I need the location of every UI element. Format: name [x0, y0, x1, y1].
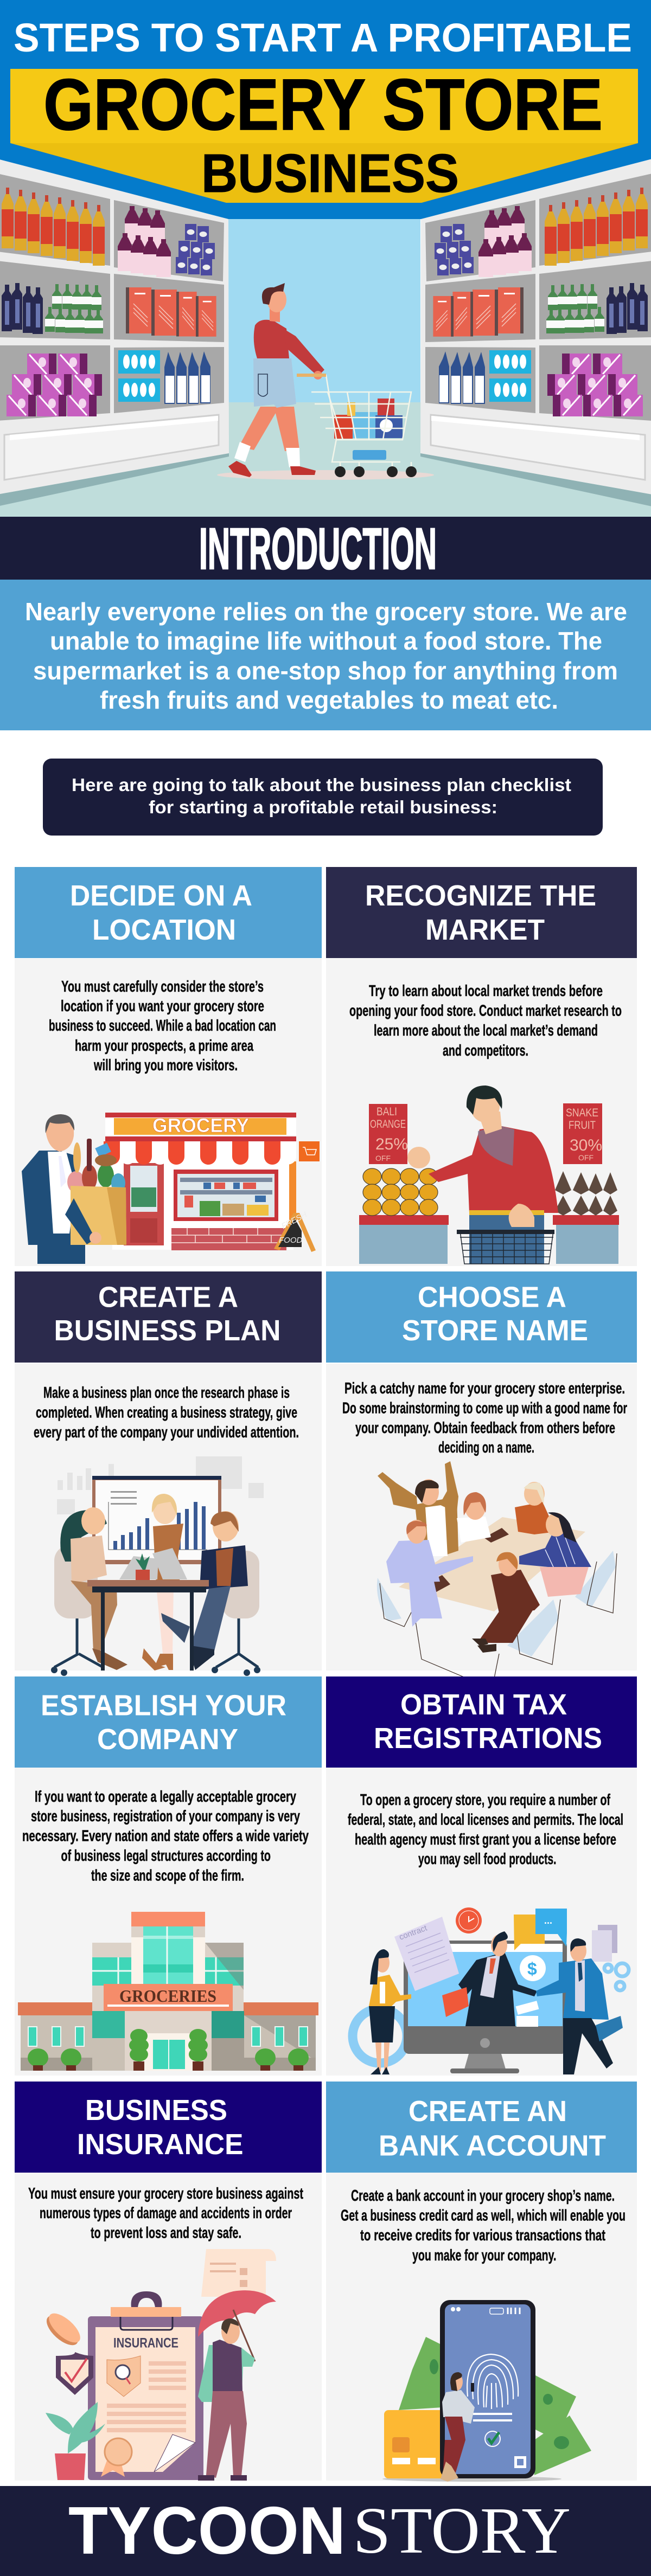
- heading: business insurance: [77, 2094, 243, 2161]
- woman in yellow jacket: [369, 1975, 411, 2006]
- heading: obtain tax registrations: OBTAIN TAX: [400, 1688, 567, 1721]
- illustration: grocery storefront with shopper: [22, 1113, 320, 1264]
- introduction paragraph: unable to imagine life without a food store. The: [50, 627, 602, 655]
- body text: location: harm your prospects, a prime area: [75, 1037, 254, 1055]
- woman white top: [457, 1517, 491, 1543]
- heading: create an bank account: CREATE AN: [409, 2095, 567, 2128]
- heading: create an bank account: [379, 2095, 606, 2162]
- heading: decide on a location: [70, 879, 252, 946]
- body text: insurance: numerous types of damage and accidents in order: [40, 2205, 292, 2222]
- footer logo: tycoonstory: TYCOON: [68, 2494, 346, 2568]
- chalkboard: fresh food: [279, 1210, 309, 1245]
- introduction paragraph: Nearly everyone relies on the grocery store. We are: [25, 598, 627, 626]
- heading: choose a store name: STORE NAME: [402, 1314, 588, 1347]
- illustration: market seller with fruit stalls: BALI: [376, 1106, 397, 1118]
- illustration: groceries building: [18, 1912, 318, 2071]
- illustration: market seller with fruit stalls: OFF: [375, 1154, 391, 1162]
- body text: location: location if you want your grocery store: [61, 998, 264, 1015]
- panel: decide on a location: [15, 867, 322, 1266]
- heading: decide on a location: LOCATION: [92, 914, 236, 946]
- panel: establish your company: [15, 1676, 322, 2076]
- table: [399, 1517, 585, 1611]
- heading: recognize the market: [365, 879, 596, 946]
- panel: business insurance: [15, 2082, 322, 2481]
- illustration: market seller with fruit stalls: OFF: [578, 1153, 593, 1162]
- introduction header band: [0, 516, 651, 581]
- gears: [604, 1963, 629, 1990]
- right man: [200, 1545, 248, 1590]
- heading: choose a store name: CHOOSE A: [418, 1281, 566, 1313]
- illustration: market seller with fruit stalls: 25%: [375, 1135, 408, 1153]
- footer logo: tycoonstory: STORY: [353, 2494, 571, 2567]
- illustration: market seller with fruit stalls: FRUIT: [569, 1119, 596, 1132]
- heading: decide on a location: DECIDE ON A: [70, 879, 252, 912]
- body text: company registration: the size and scope of the firm.: [91, 1867, 244, 1885]
- table and laptops: [119, 1556, 158, 1579]
- title: business: BUSINESS: [201, 143, 459, 204]
- sign: groceries: GROCERIES: [119, 1986, 216, 2006]
- body text: market: [349, 982, 622, 1059]
- heading: business insurance: BUSINESS: [85, 2094, 227, 2127]
- heading: recognize the market: MARKET: [425, 914, 545, 946]
- heading: obtain tax registrations: REGISTRATIONS: [374, 1722, 602, 1755]
- body text: company registration: store business, registration of your company is very: [31, 1808, 300, 1825]
- heading: obtain tax registrations: [374, 1688, 602, 1755]
- body text: store name: deciding on a name.: [438, 1439, 534, 1456]
- panel: obtain tax registrations: [326, 1676, 637, 2076]
- body text: business plan: every part of the company your undivided attention.: [34, 1424, 299, 1441]
- man with phone: [442, 2390, 475, 2424]
- body text: business plan: [34, 1384, 299, 1441]
- heading: establish your company: [41, 1690, 286, 1756]
- sign: groceries: [104, 1984, 233, 2011]
- body text: location: [49, 978, 276, 1074]
- body text: business plan: Make a business plan once the research phase is: [43, 1384, 290, 1402]
- panel: choose a store name: [326, 1271, 637, 1689]
- illustration: market seller with fruit stalls: [359, 1085, 619, 1264]
- illustration: market seller with fruit stalls: 30%: [570, 1136, 602, 1154]
- hero: floor: [0, 402, 651, 517]
- left woman: [60, 1510, 107, 1562]
- illustration: insurance clipboard with umbrella man: [42, 2249, 276, 2481]
- illustration: tax registration handshake at monitor: [353, 1907, 629, 2074]
- body text: location: will bring you more visitors.: [93, 1057, 238, 1074]
- body text: company registration: of business legal structures according to: [61, 1847, 271, 1865]
- panel: create a business plan: [15, 1271, 322, 1676]
- heading: recognize the market: RECOGNIZE THE: [365, 879, 596, 912]
- clipboard text: insurance: INSURANCE: [113, 2336, 178, 2351]
- man in brown: [491, 1570, 540, 1613]
- heading: create a business plan: CREATE A: [98, 1281, 238, 1313]
- illustration: phone, fingerprint, card and money: [382, 2300, 591, 2482]
- body text: company registration: [22, 1788, 309, 1885]
- illustration: market seller with fruit stalls: SNAKE: [566, 1107, 598, 1119]
- heading: establish your company: ESTABLISH YOUR: [41, 1690, 286, 1722]
- footer logo: tycoonstory: [68, 2494, 571, 2568]
- right man: [536, 1958, 609, 2020]
- callout: business plan checklist: [43, 759, 603, 836]
- panel: create an bank account: [326, 2082, 637, 2482]
- hero: left grocery shelf: [0, 159, 229, 506]
- heading: create an bank account: BANK ACCOUNT: [379, 2130, 606, 2162]
- heading: introduction: INTRODUCTION: [199, 516, 437, 581]
- panel: recognize the market: [326, 867, 637, 1266]
- body text: bank account: you make for your company.: [412, 2247, 557, 2264]
- illustration: tax registration handshake at monitor: contract: [398, 1923, 429, 1942]
- body text: store name: [342, 1380, 627, 1456]
- title banner: yellow pentagon: [10, 69, 638, 203]
- body text: licenses: [348, 1791, 623, 1868]
- heading: business insurance: INSURANCE: [77, 2128, 243, 2161]
- body text: company registration: necessary. Every nation and state offers a wide variety: [22, 1827, 309, 1845]
- hero: ceiling background: [0, 0, 651, 219]
- heading: create a business plan: BUSINESS PLAN: [54, 1314, 281, 1347]
- callout: business plan checklist: for starting a profitable retail business:: [149, 798, 497, 818]
- heading: create a business plan: [54, 1281, 281, 1347]
- body text: insurance: You must ensure your grocery store business against: [28, 2185, 303, 2202]
- callout: business plan checklist: Here are going to talk about the business plan checklist: [72, 775, 571, 795]
- body text: market: and competitors.: [443, 1042, 528, 1059]
- hero: right grocery shelf: [420, 159, 651, 506]
- illustration: tax registration handshake at monitor: ...: [544, 1915, 552, 1926]
- body text: bank account: [341, 2187, 626, 2264]
- body text: location: business to succeed. While a bad location can: [49, 1017, 276, 1035]
- chalkboard: fresh food: FRESH: [280, 1210, 309, 1231]
- hero: shopper pushing cart: [217, 283, 434, 480]
- central man: [458, 1952, 537, 2026]
- heading: choose a store name: [402, 1281, 588, 1347]
- chairs: [377, 1551, 616, 1656]
- footer band: [0, 2486, 651, 2576]
- illustration: market seller with fruit stalls: ORANGE: [370, 1118, 406, 1130]
- striped woman: [519, 1532, 591, 1567]
- introduction paragraph: supermarket is a one-stop shop for anything from: [33, 657, 618, 685]
- chalkboard: fresh food: FOOD: [279, 1236, 302, 1245]
- umbrella man: [198, 2290, 276, 2337]
- body text: licenses: you may sell food products.: [418, 1851, 557, 1868]
- heading: establish your company: COMPANY: [97, 1723, 238, 1756]
- middle woman: [153, 1524, 183, 1586]
- title line: steps to start a profitable: STEPS TO START A PROFITABLE: [14, 15, 632, 60]
- introduction paragraph: fresh fruits and vegetables to meat etc.: [100, 686, 558, 714]
- illustration: tax registration handshake at monitor: $: [527, 1959, 537, 1978]
- body text: location: You must carefully consider the store’s: [61, 978, 264, 995]
- body text: business plan: completed. When creating a business strategy, give: [36, 1404, 297, 1422]
- illustration: team presenting a business plan: [51, 1456, 264, 1676]
- blonde woman: [515, 1502, 556, 1534]
- illustration: team brainstorming around a table: [377, 1461, 617, 1689]
- body text: insurance: [28, 2185, 303, 2242]
- introduction paragraph: [25, 598, 627, 714]
- sign text: grocery: GROCERY: [152, 1114, 249, 1136]
- standing man: [415, 1496, 458, 1556]
- introduction text panel: [0, 580, 651, 730]
- body text: company registration: If you want to operate a legally acceptable grocery: [35, 1788, 296, 1806]
- woman in lilac: [386, 1540, 440, 1583]
- hero: back wall: [228, 219, 420, 402]
- body text: insurance: to prevent loss and stay safe.: [91, 2225, 241, 2242]
